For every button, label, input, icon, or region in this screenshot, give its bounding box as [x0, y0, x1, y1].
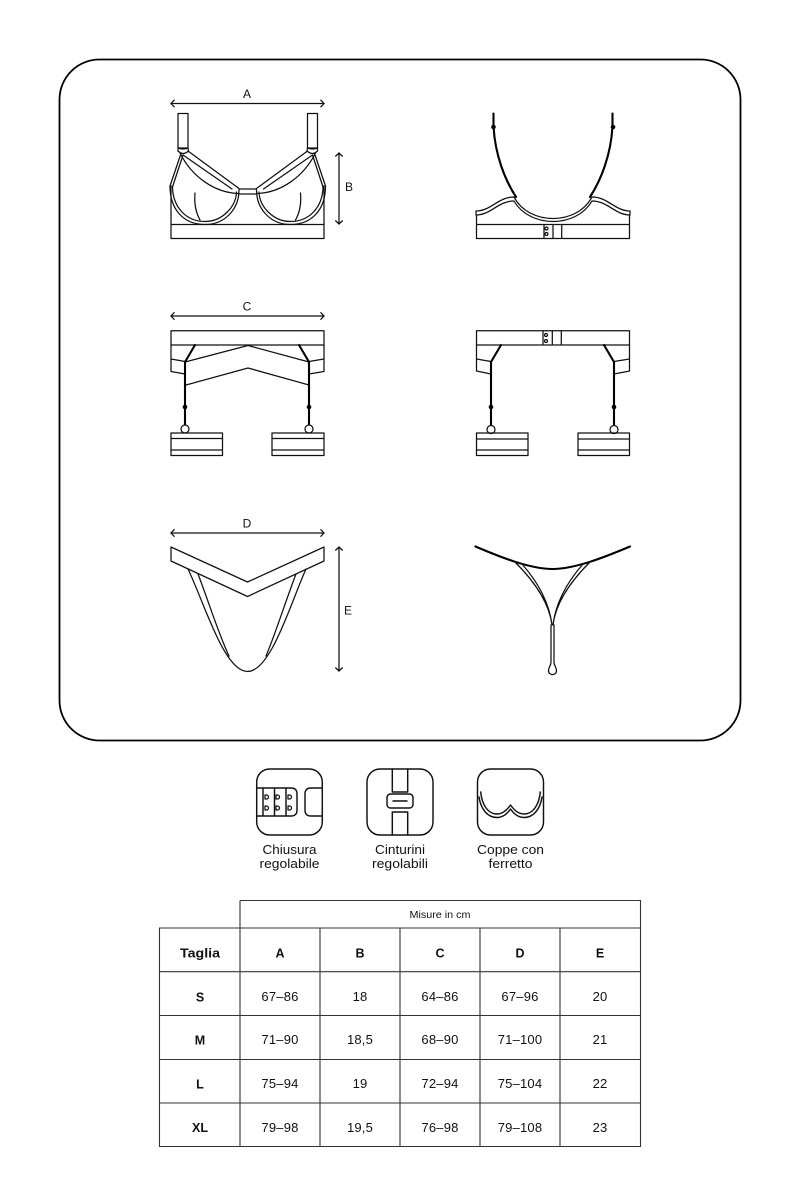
- row S: [196, 989, 607, 1004]
- row L: 22: [593, 1076, 607, 1091]
- bra back: [476, 114, 630, 238]
- row S: 18: [353, 989, 367, 1004]
- bra right cup and straps: [256, 114, 326, 224]
- row M: 18,5: [347, 1032, 373, 1047]
- row L: 75–94: [261, 1076, 299, 1091]
- thong back: [476, 546, 630, 675]
- caption: adjustable closure: Chiusura: [262, 842, 317, 857]
- panel: garment diagrams: [60, 60, 740, 740]
- row XL: 79–108: [498, 1120, 542, 1135]
- row L: 72–94: [421, 1076, 459, 1091]
- measure B arrow: [339, 153, 353, 224]
- bra left cup and straps: [170, 114, 239, 224]
- table header row: D: [515, 946, 525, 960]
- row L: 75–104: [498, 1076, 542, 1091]
- garter belt back: [476, 331, 630, 456]
- table header row: C: [435, 946, 445, 960]
- icon: underwired cups: [478, 769, 544, 835]
- back left strap: [487, 345, 501, 434]
- garter belt front with measure C: [171, 300, 324, 456]
- back triangle: [515, 562, 590, 625]
- row S: 67–86: [261, 989, 299, 1004]
- table header row: [180, 946, 604, 960]
- table header row: E: [596, 946, 604, 960]
- back straps: [494, 114, 612, 197]
- row M: [195, 1032, 607, 1048]
- size table: [160, 900, 640, 1146]
- row L: L: [196, 1078, 204, 1092]
- measure D arrow: D: [243, 516, 252, 530]
- back right cuff: [578, 433, 630, 456]
- row M: 71–100: [498, 1032, 542, 1047]
- caption: adjustable straps: regolabili: [372, 856, 428, 871]
- caption: underwired cups: ferretto: [488, 856, 532, 871]
- back waist string: [476, 546, 630, 569]
- row M: 71–90: [261, 1032, 299, 1047]
- row S: S: [196, 990, 204, 1004]
- back belt with hooks: [476, 331, 630, 345]
- row XL: 79–98: [261, 1120, 299, 1135]
- caption: adjustable straps: Cinturini: [375, 842, 425, 857]
- back string and drop: [548, 625, 556, 675]
- icon: adjustable closure: [257, 769, 322, 835]
- caption: adjustable closure: regolabile: [260, 856, 320, 871]
- measure E arrow: E: [344, 604, 352, 618]
- table header row: B: [355, 946, 365, 960]
- back cup wires and wings: [476, 197, 630, 222]
- icon: adjustable straps: [367, 769, 433, 835]
- bra front with measures A and B: [170, 87, 353, 238]
- waistband: [171, 547, 324, 596]
- row XL: 23: [593, 1120, 607, 1135]
- measure E arrow: [339, 547, 352, 671]
- thong body: [188, 569, 306, 672]
- feature icons: [257, 769, 544, 871]
- row M: M: [195, 1034, 205, 1048]
- back band with hooks: [476, 215, 630, 238]
- back right strap: [604, 345, 618, 434]
- row S: 64–86: [421, 989, 459, 1004]
- row XL: [192, 1120, 607, 1135]
- left garter strap: [181, 345, 195, 433]
- bra bridge: [239, 189, 256, 194]
- row S: 20: [593, 989, 607, 1004]
- row M: 68–90: [421, 1032, 459, 1047]
- measure C arrow: C: [243, 300, 252, 314]
- table grid: [160, 900, 640, 1146]
- right garter strap: [299, 345, 313, 433]
- row M: 21: [593, 1032, 607, 1047]
- row S: 67–96: [501, 989, 539, 1004]
- bra band: [171, 186, 324, 238]
- table header row: A: [275, 946, 285, 960]
- row XL: 76–98: [421, 1120, 459, 1135]
- right cuff: [272, 433, 324, 456]
- caption: underwired cups: Coppe con: [477, 842, 544, 857]
- left cuff: [171, 433, 222, 456]
- back left cuff: [476, 433, 528, 456]
- belt: [171, 331, 324, 345]
- table caption: Misure in cm: [410, 910, 470, 921]
- table header row: Taglia: [180, 946, 221, 960]
- measure B arrow: B: [345, 180, 353, 194]
- thong front with measures D and E: [171, 516, 352, 672]
- row XL: XL: [192, 1121, 208, 1135]
- row L: 19: [353, 1076, 367, 1091]
- measure A arrow: A: [243, 87, 251, 101]
- row XL: 19,5: [347, 1120, 373, 1135]
- front chevron: [185, 346, 309, 385]
- row L: [196, 1076, 607, 1092]
